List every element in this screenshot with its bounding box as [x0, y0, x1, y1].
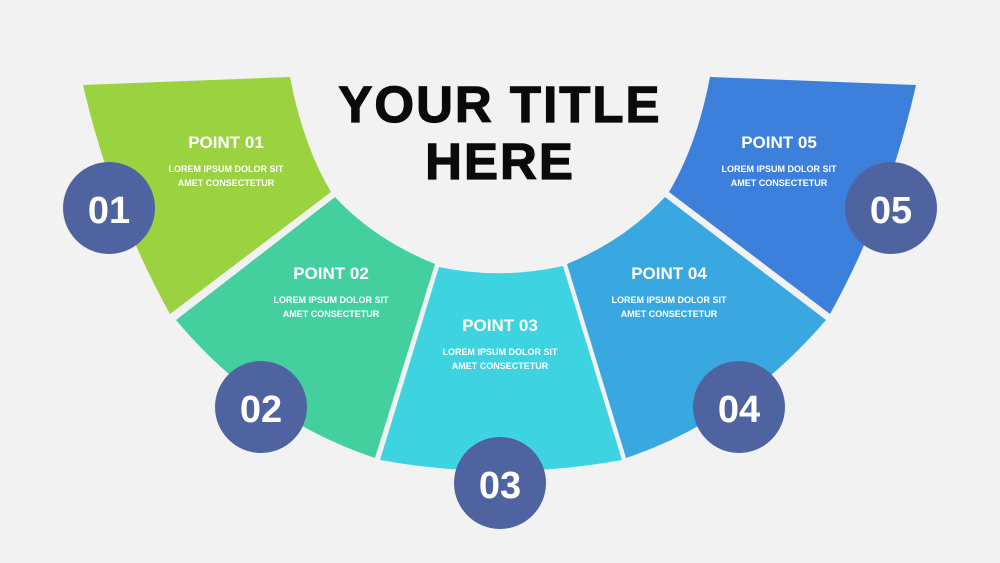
text: point 05: AMET CONSECTETUR: [731, 178, 828, 188]
badge 01: [63, 162, 155, 254]
text: point 03: [442, 316, 558, 371]
text: point 05: [721, 133, 837, 188]
segment 5: [669, 77, 916, 314]
segment 2: [176, 197, 435, 458]
text: point 01: LOREM IPSUM DOLOR SIT: [168, 164, 284, 174]
badge 04: 04: [718, 389, 760, 431]
text: point 03: AMET CONSECTETUR: [452, 361, 549, 371]
badge 02: 02: [240, 389, 282, 431]
segment 4: [567, 197, 826, 458]
number badges: [63, 162, 937, 529]
text: point 02: AMET CONSECTETUR: [283, 309, 380, 319]
title: [338, 76, 662, 190]
text: point 04: AMET CONSECTETUR: [621, 309, 718, 319]
text: point 01: [168, 133, 284, 188]
text: point 05: LOREM IPSUM DOLOR SIT: [721, 164, 837, 174]
title: HERE: [425, 133, 575, 190]
badge 01: 01: [88, 190, 130, 232]
text: point 02: LOREM IPSUM DOLOR SIT: [273, 295, 389, 305]
badge 05: [845, 162, 937, 254]
text: point 04: [611, 264, 727, 319]
text: point 01: POINT 01: [188, 133, 264, 152]
text: point 05: POINT 05: [741, 133, 817, 152]
badge 02: [215, 361, 307, 453]
text: point 01: AMET CONSECTETUR: [178, 178, 275, 188]
badge 04: [693, 361, 785, 453]
text: point 03: LOREM IPSUM DOLOR SIT: [442, 347, 558, 357]
text: point 02: [273, 264, 389, 319]
segment 1: [83, 77, 331, 314]
badge 03: 03: [479, 465, 521, 507]
text: point 02: POINT 02: [293, 264, 369, 283]
text: point 04: LOREM IPSUM DOLOR SIT: [611, 295, 727, 305]
badge 05: 05: [870, 190, 912, 232]
segment 3: [380, 266, 622, 471]
badge 03: [454, 437, 546, 529]
text: point 04: POINT 04: [631, 264, 707, 283]
title: YOUR TITLE: [338, 76, 662, 133]
text: point 03: POINT 03: [462, 316, 538, 335]
